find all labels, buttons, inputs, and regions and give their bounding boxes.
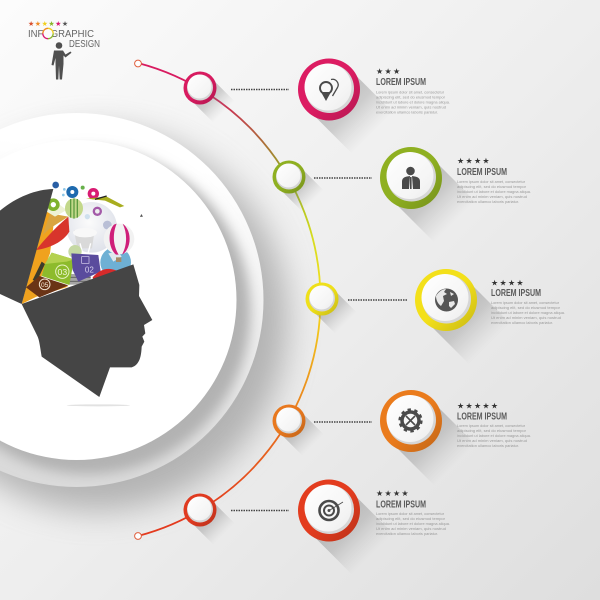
icon: globe xyxy=(435,288,458,312)
item 1: text: Ut enim ad minim veniam, quis nostrud xyxy=(376,106,446,110)
item 3: text: LOREM IPSUM xyxy=(491,288,541,299)
green patch xyxy=(47,197,67,217)
item 3: text: ★★★★ xyxy=(491,278,525,288)
node 4 xyxy=(272,404,324,456)
bulb xyxy=(66,202,117,285)
item 4: text: adipiscing elit, sed do eiusmod tempor xyxy=(457,429,527,433)
item 3: text: Ut enim ad minim veniam, quis nostrud xyxy=(491,316,561,320)
item 1: text: LOREM IPSUM xyxy=(376,77,426,88)
icon: gear xyxy=(400,410,421,431)
item 5: text: Ut enim ad minim veniam, quis nostrud xyxy=(376,527,446,531)
item 2: text: ★★★★ xyxy=(457,156,491,166)
icon: person xyxy=(402,167,420,189)
item 5: text: LOREM IPSUM xyxy=(376,500,426,510)
item 5: text: ★★★★ xyxy=(376,489,410,498)
item 5: text: exercitation ullamco laboris pariatur. xyxy=(376,532,438,536)
item 4: text: incididunt ut labore et dolore magna aliqua. xyxy=(457,434,531,438)
dotted connectors xyxy=(231,90,407,510)
item 2: text: incididunt ut labore et dolore magna aliqua. xyxy=(457,190,531,194)
item 3: text: exercitation ullamco laboris pariatur. xyxy=(491,321,553,325)
icon: map pins xyxy=(320,79,338,101)
item 4: text: exercitation ullamco laboris pariatur. xyxy=(457,444,519,448)
logo text: INFOGRAPHIC xyxy=(28,29,94,40)
icon: target xyxy=(320,501,343,520)
red badge xyxy=(93,269,117,280)
globe xyxy=(100,247,131,278)
beige patch xyxy=(43,213,68,235)
node 5 xyxy=(184,494,235,545)
orange wedge xyxy=(22,197,68,304)
item 2: text xyxy=(457,156,531,204)
item 4: badge xyxy=(380,390,475,485)
olive streamer xyxy=(86,197,124,207)
item 1: badge xyxy=(298,58,393,154)
timeline arc xyxy=(138,63,320,536)
node 2 xyxy=(272,160,324,212)
logo: DESIGN xyxy=(69,39,100,50)
item 5: badge xyxy=(298,480,393,575)
dark stripes xyxy=(33,262,45,282)
item 1: text: Lorem ipsum dolor sit amet, consectetur xyxy=(376,90,445,94)
logo person xyxy=(52,42,72,80)
item 2: text: LOREM IPSUM xyxy=(457,167,507,178)
red swoosh xyxy=(36,217,69,250)
small badges xyxy=(47,182,99,211)
disc shadow xyxy=(0,129,288,511)
head illustration xyxy=(0,182,152,406)
item 1: text: incididunt ut labore et dolore magna aliqua. xyxy=(376,100,450,104)
panel: central disc xyxy=(0,113,264,487)
item 3: text: Lorem ipsum dolor sit amet, consectetur xyxy=(491,301,560,305)
item 1: text xyxy=(376,67,450,114)
purple cube 02: 02 xyxy=(85,266,94,275)
item 4: text: ★★★★★ xyxy=(457,402,499,410)
item 2: badge xyxy=(380,147,475,242)
logo stars: ★★★★★★ xyxy=(28,20,69,28)
item 5: text xyxy=(376,489,450,536)
head face xyxy=(22,264,152,397)
green cube 03 xyxy=(42,253,74,285)
item 5: text: adipiscing elit, sed do eiusmod tempor xyxy=(376,517,446,521)
item 4: text: Ut enim ad minim veniam, quis nostrud xyxy=(457,439,527,443)
arc end dot top xyxy=(135,60,141,67)
node 3 xyxy=(306,282,357,334)
item 3: text: incididunt ut labore et dolore magna aliqua. xyxy=(491,311,565,315)
arc end dot bottom xyxy=(135,533,141,539)
item 3: badge xyxy=(415,269,510,364)
item 1: text: adipiscing elit, sed do eiusmod tempor xyxy=(376,96,446,100)
logo xyxy=(28,20,100,80)
pink balloon xyxy=(104,224,134,262)
logo ring xyxy=(43,28,53,39)
green balloon xyxy=(65,198,83,219)
item 4: text xyxy=(457,402,531,448)
item 1: text: exercitation ullamco laboris pariatur. xyxy=(376,110,438,114)
item 2: text: exercitation ullamco laboris pariatur. xyxy=(457,200,519,204)
item 3: text xyxy=(491,278,565,325)
item 1: text: ★★★ xyxy=(376,67,401,76)
brown cube 05 xyxy=(26,276,68,297)
item 2: text: Lorem ipsum dolor sit amet, consectetur xyxy=(457,180,526,184)
item 3: text: adipiscing elit, sed do eiusmod tempor xyxy=(491,306,561,310)
purple cube 02 xyxy=(71,253,101,282)
item 5: text: Lorem ipsum dolor sit amet, consectetur xyxy=(376,512,445,516)
green cube 03: 03 xyxy=(58,267,67,277)
item 5: text: incididunt ut labore et dolore magna aliqua. xyxy=(376,522,450,526)
item 2: text: adipiscing elit, sed do eiusmod tempor xyxy=(457,185,527,189)
head back flap xyxy=(0,189,53,304)
brown cube 05: 05 xyxy=(41,282,49,289)
item 2: text: Ut enim ad minim veniam, quis nostrud xyxy=(457,195,527,199)
node 1 xyxy=(184,72,235,123)
item 4: text: Lorem ipsum dolor sit amet, consectetur xyxy=(457,424,526,428)
item 4: text: LOREM IPSUM xyxy=(457,412,507,422)
